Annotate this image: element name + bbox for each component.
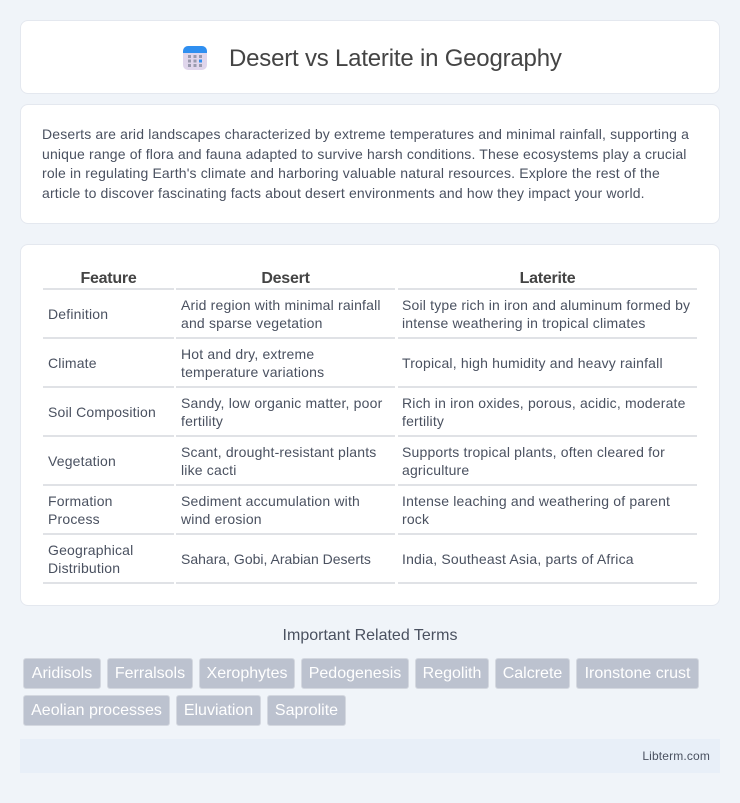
intro text <box>42 126 689 201</box>
tag <box>23 695 170 726</box>
table header: Feature <box>80 270 137 287</box>
row: formation process: wind erosion <box>181 511 262 527</box>
tag: Regolith <box>423 665 481 682</box>
row: soil composition: fertility <box>181 413 223 429</box>
table header <box>80 270 576 287</box>
related terms heading: Important Related Terms <box>283 627 457 644</box>
row: definition: Definition <box>48 306 108 322</box>
title card <box>20 20 720 94</box>
row: formation process: Intense leaching and weathering of parent <box>402 493 670 509</box>
row: vegetation <box>48 444 665 478</box>
tag: Saprolite <box>275 702 338 719</box>
tag: Aridisols <box>32 665 92 682</box>
footer credit: Libterm.com <box>642 749 710 763</box>
intro text: unique range of flora and fauna adapted to survive harsh conditions. These ecosystems play a crucial <box>42 146 687 162</box>
row: geographical distribution: Sahara, Gobi, Arabian Deserts <box>181 551 371 567</box>
row: soil composition: Soil Composition <box>48 404 156 420</box>
tag <box>107 658 193 689</box>
row: vegetation: Supports tropical plants, often cleared for <box>402 444 665 460</box>
row: climate: Tropical, high humidity and heavy rainfall <box>402 355 663 371</box>
row: definition: and sparse vegetation <box>181 315 323 331</box>
tag: Pedogenesis <box>309 665 401 682</box>
intro text: role in regulating Earth's climate and harboring valuable natural resources. Explore the rest of the <box>42 165 660 181</box>
row: formation process: rock <box>402 511 429 527</box>
footer bar <box>20 739 720 773</box>
row: vegetation: Scant, drought-resistant plants <box>181 444 376 460</box>
comparison table <box>43 270 697 584</box>
tag <box>267 695 346 726</box>
row: formation process <box>48 493 670 527</box>
row: definition: intense weathering in tropical climates <box>402 315 646 331</box>
tag: Calcrete <box>503 665 562 682</box>
intro text: Deserts are arid landscapes characterized by extreme temperatures and minimal rainfall, supporting a <box>42 126 689 142</box>
table card <box>20 244 720 606</box>
related terms tags <box>23 658 699 726</box>
table header: Laterite <box>520 270 575 287</box>
row: soil composition: Sandy, low organic matter, poor <box>181 395 382 411</box>
row: climate: temperature variations <box>181 364 324 380</box>
tag: Eluviation <box>184 702 253 719</box>
table header: Desert <box>261 270 310 287</box>
row: formation process: Process <box>48 511 100 527</box>
tag <box>176 695 261 726</box>
row: soil composition <box>48 395 686 429</box>
row: geographical distribution: Distribution <box>48 560 120 576</box>
row: geographical distribution <box>48 542 634 576</box>
row: geographical distribution: India, Southeast Asia, parts of Africa <box>402 551 634 567</box>
tag <box>199 658 295 689</box>
row: definition: Arid region with minimal rainfall <box>181 297 381 313</box>
row: climate: Hot and dry, extreme <box>181 346 314 362</box>
tag: Ferralsols <box>115 665 185 682</box>
intro card <box>20 104 720 224</box>
row: soil composition: Rich in iron oxides, porous, acidic, moderate <box>402 395 686 411</box>
row: vegetation: like cacti <box>181 462 236 478</box>
tag <box>23 658 101 689</box>
row: climate: Climate <box>48 355 97 371</box>
tag <box>415 658 489 689</box>
row: geographical distribution: Geographical <box>48 542 133 558</box>
row: vegetation: Vegetation <box>48 453 116 469</box>
row: vegetation: agriculture <box>402 462 469 478</box>
row: formation process: Formation <box>48 493 113 509</box>
tag <box>576 658 699 689</box>
tag <box>301 658 409 689</box>
icon: calendar <box>183 46 207 70</box>
row: climate <box>48 346 663 380</box>
row: formation process: Sediment accumulation with <box>181 493 360 509</box>
row: definition: Soil type rich in iron and aluminum formed by <box>402 297 690 313</box>
tag: Ironstone crust <box>585 665 690 682</box>
tag: Aeolian processes <box>31 702 162 719</box>
tag: Xerophytes <box>207 665 287 682</box>
title: Desert vs Laterite in Geography <box>229 45 562 72</box>
row: soil composition: fertility <box>402 413 444 429</box>
row: definition <box>48 297 690 331</box>
tag <box>495 658 570 689</box>
intro text: article to discover fascinating facts about desert environments and how they impact your world. <box>42 185 645 201</box>
